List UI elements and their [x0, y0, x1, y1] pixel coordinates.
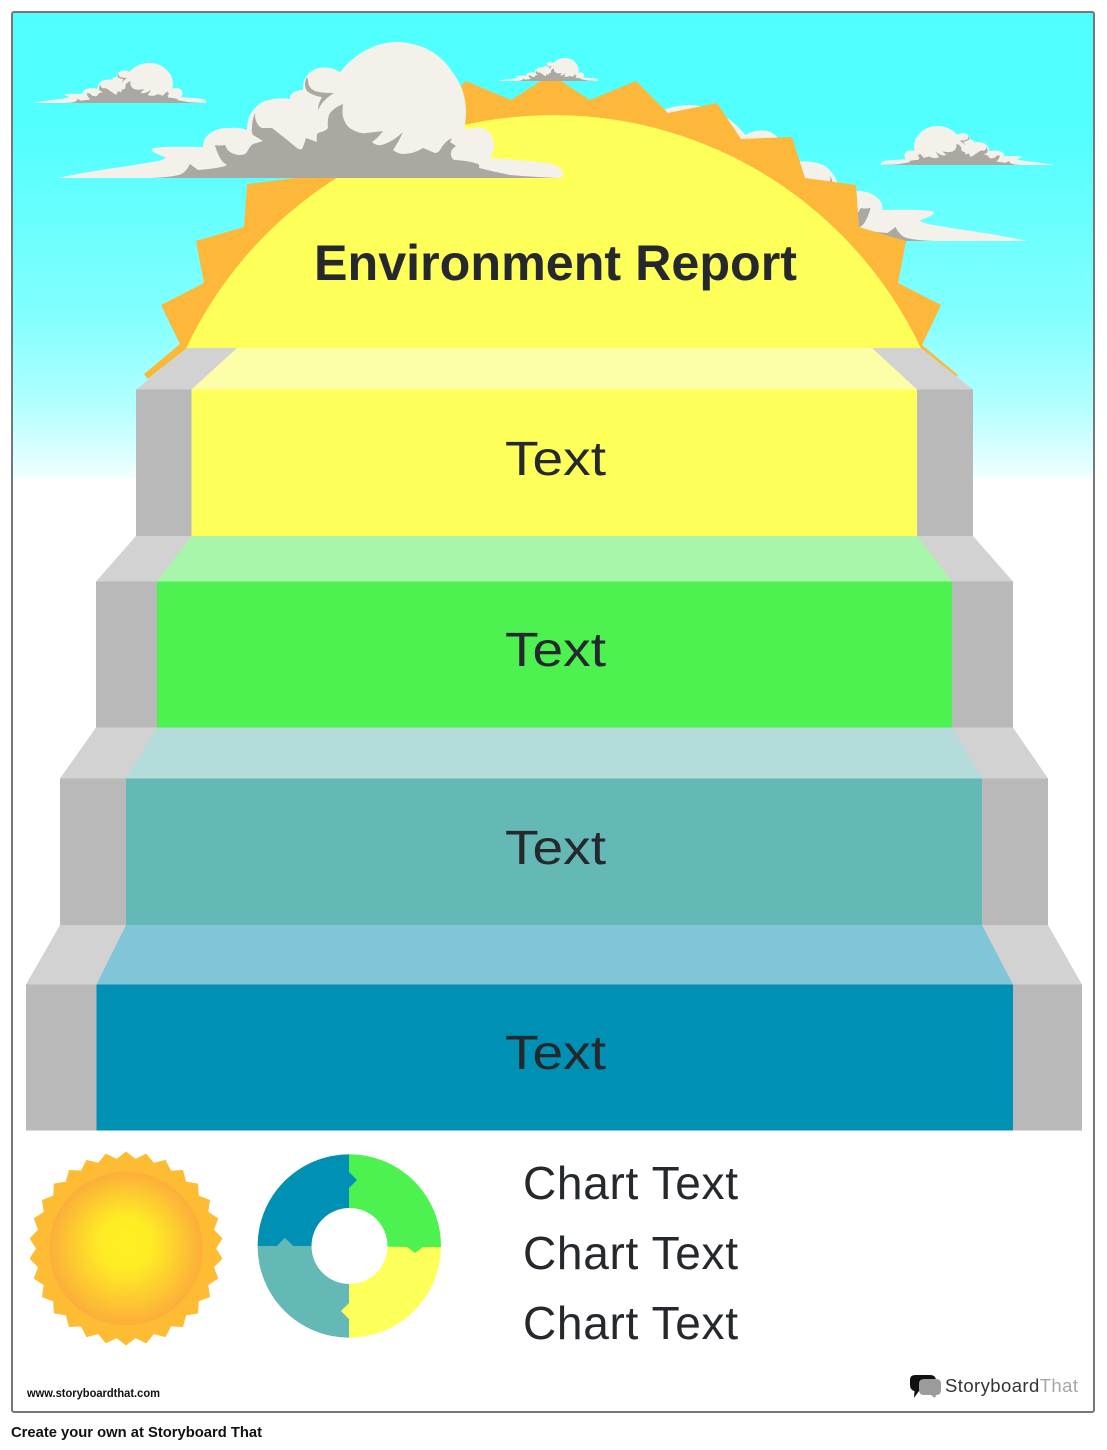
step 2 label: Text: [505, 624, 606, 677]
chart legend text: [523, 1157, 738, 1349]
title: Environment Report: [314, 235, 797, 291]
step 3: teal: [60, 728, 1048, 925]
website url: www.storyboardthat.com: [26, 1386, 160, 1400]
step 4: blue: [26, 925, 1082, 1130]
step 3 label: Text: [505, 822, 606, 875]
cloud: main front: [58, 42, 563, 178]
segment: blue: [258, 1154, 357, 1246]
step 1 label: Text: [505, 433, 606, 486]
cloud behind sun: [522, 105, 1028, 241]
sky background: [12, 12, 1094, 478]
segment: green: [349, 1154, 441, 1253]
icon: speech bubbles: [910, 1375, 941, 1398]
chart text line 3: Chart Text: [523, 1297, 738, 1349]
sun dome: [186, 115, 921, 349]
chart text line 1: Chart Text: [523, 1157, 738, 1209]
cloud: top centre small: [497, 58, 598, 81]
segment: yellow: [341, 1246, 441, 1338]
logo: Storyboard That: [910, 1375, 1078, 1398]
logo wordmark: StoryboardThat: [945, 1375, 1078, 1396]
staircase: [26, 348, 1082, 1130]
icon: sun badge: [30, 1152, 222, 1346]
step 1: yellow: [136, 348, 973, 536]
cloud: top left small: [33, 63, 206, 103]
step 4 label: Text: [505, 1027, 606, 1080]
footer caption: Create your own at Storyboard That: [11, 1424, 262, 1441]
cloud: right small: [881, 126, 1054, 165]
donut hole: [312, 1208, 388, 1284]
donut chart: [258, 1154, 441, 1338]
segment: teal: [258, 1238, 349, 1338]
sun rays: [144, 81, 958, 379]
chart text line 2: Chart Text: [523, 1227, 738, 1279]
step 2: green: [96, 536, 1013, 728]
